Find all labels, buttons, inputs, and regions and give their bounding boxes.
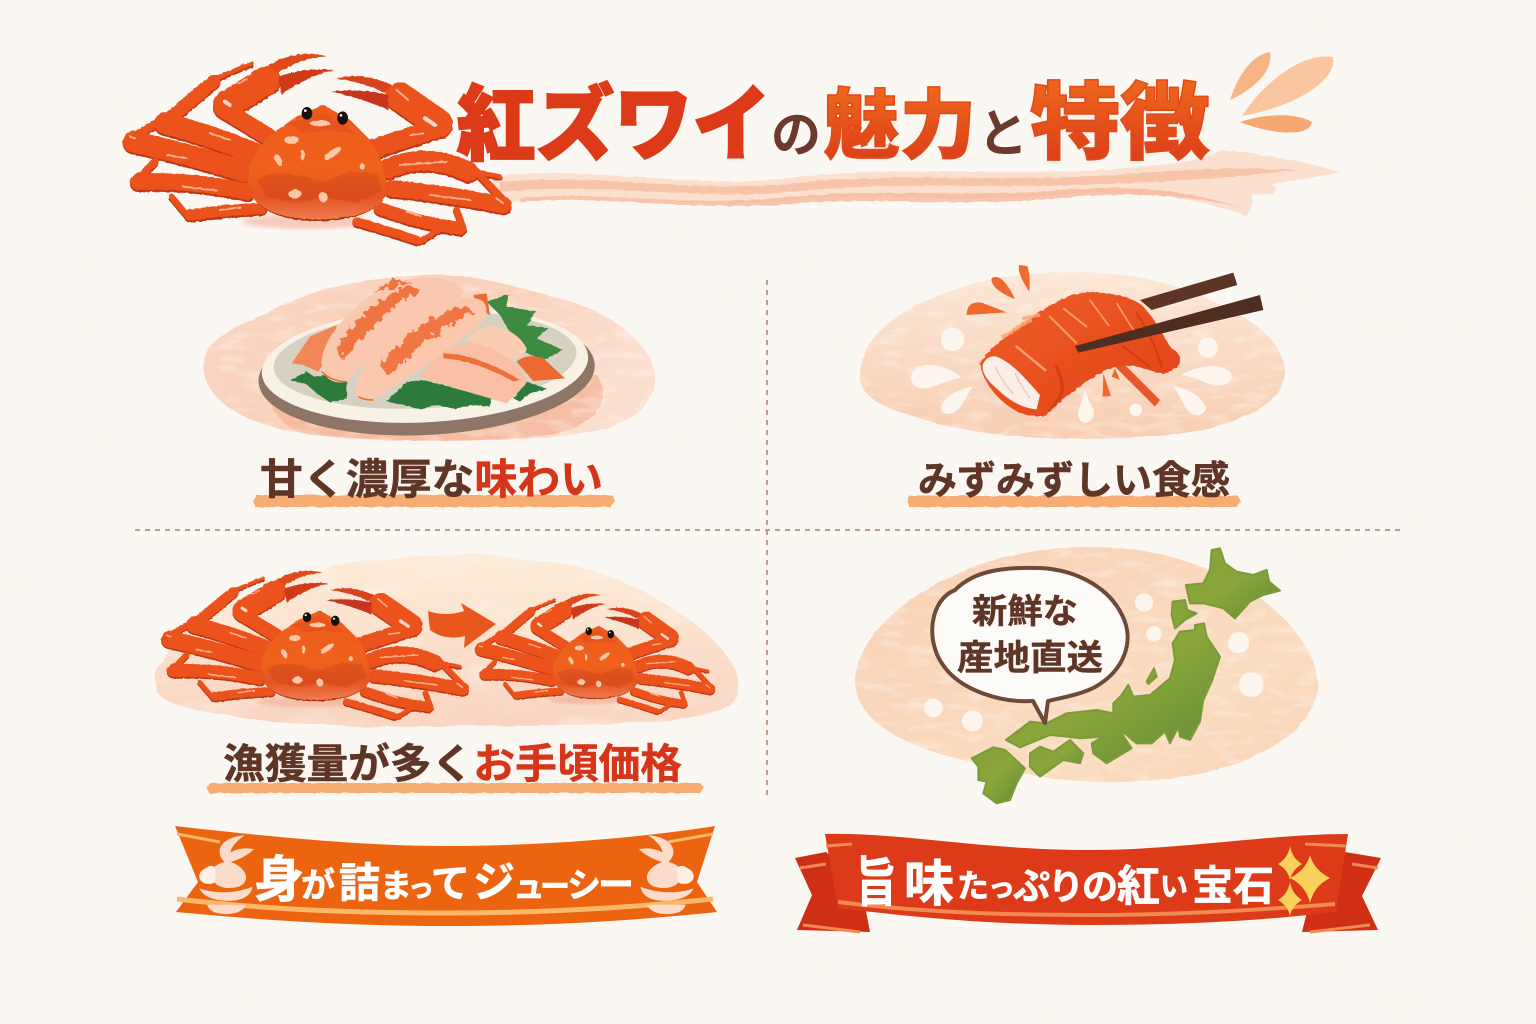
label underline [253, 495, 615, 507]
title: 紅ズワイ [457, 80, 771, 171]
icon: small crab [478, 594, 712, 713]
title: の [771, 107, 821, 163]
ribbon text: full of, red jewel: の [1082, 866, 1118, 907]
panel: sweet rich taste [203, 274, 655, 507]
icon: sparkles [1278, 846, 1330, 916]
title banner brush stroke [492, 150, 1340, 216]
ribbon text: umami: 旨 [856, 854, 896, 913]
background wash with dots [855, 547, 1318, 782]
illustration: crab leg held by chopsticks [860, 265, 1285, 439]
label: juicy texture: みずみずしい食感 [918, 460, 1230, 503]
label underline [207, 783, 704, 793]
icon: left shrimp [199, 835, 254, 914]
map of Japan [972, 548, 1280, 803]
ribbon text: ジ [473, 859, 515, 906]
callout text: 新鮮な [972, 593, 1078, 631]
icon: large crab [166, 571, 465, 719]
ribbon text: full of, red jewel: り [1048, 866, 1084, 907]
illustration: crab meat on plate [203, 274, 655, 444]
ribbon text: full of, red jewel: 味 [904, 856, 954, 912]
ribbon text: full of, red jewel: 紅 [1117, 863, 1160, 911]
ribbon text: full of, red jewel: 石 [1233, 863, 1274, 909]
ribbon text: full of, red jewel: っ [988, 873, 1015, 903]
ribbon: red jewel full of umami [795, 834, 1381, 932]
ribbon text: 詰 [339, 860, 380, 906]
label: abundant catch and affordable price: 漁獲量が多くお手頃価格 [223, 741, 682, 787]
ribbon text: full of, red jewel: い [1160, 871, 1188, 902]
speech bubble: 産地直送 [957, 639, 1103, 678]
left ribbon tail [795, 852, 870, 932]
ribbon text: ー [540, 871, 570, 904]
ribbon: packed with juicy meat [175, 826, 717, 926]
panel: juicy texture [860, 265, 1285, 507]
ribbon trim [800, 844, 1378, 932]
ribbon text: が [301, 866, 335, 905]
panel: abundant catch at affordable price [155, 555, 739, 793]
ribbon text: ま [380, 868, 412, 904]
icon: splash [1230, 52, 1333, 133]
ribbon text: full of, red jewel: た [957, 868, 989, 904]
ribbon text: full of, red jewel: ぷ [1013, 866, 1050, 907]
ribbon text: て [431, 863, 470, 906]
speech bubble [932, 568, 1128, 723]
panel: direct from the source [855, 547, 1318, 803]
title: と [978, 106, 1028, 164]
ribbon text: っ [408, 873, 434, 903]
title: 特徴 [1030, 76, 1210, 170]
icon: title crab [128, 54, 507, 244]
label: sweet rich taste: 甘く濃厚な味わい [260, 456, 603, 503]
ribbon trim [177, 834, 713, 913]
ribbon text: シ [567, 867, 601, 905]
ribbon body [825, 834, 1348, 925]
ribbon text: 身 [254, 852, 304, 908]
title: 魅力 [824, 84, 976, 169]
ribbon text: ー [598, 864, 634, 905]
title [457, 76, 1210, 171]
label underline [907, 496, 1241, 507]
arrow: to smaller crab [428, 603, 496, 648]
ribbon text: full of, red jewel: 宝 [1192, 863, 1233, 909]
grid dividers [135, 280, 1405, 795]
right ribbon tail [1302, 852, 1381, 932]
ribbon shape [175, 826, 717, 926]
background wash [155, 555, 739, 726]
icon: right shrimp [639, 835, 694, 914]
ribbon text: ュ [513, 868, 545, 904]
